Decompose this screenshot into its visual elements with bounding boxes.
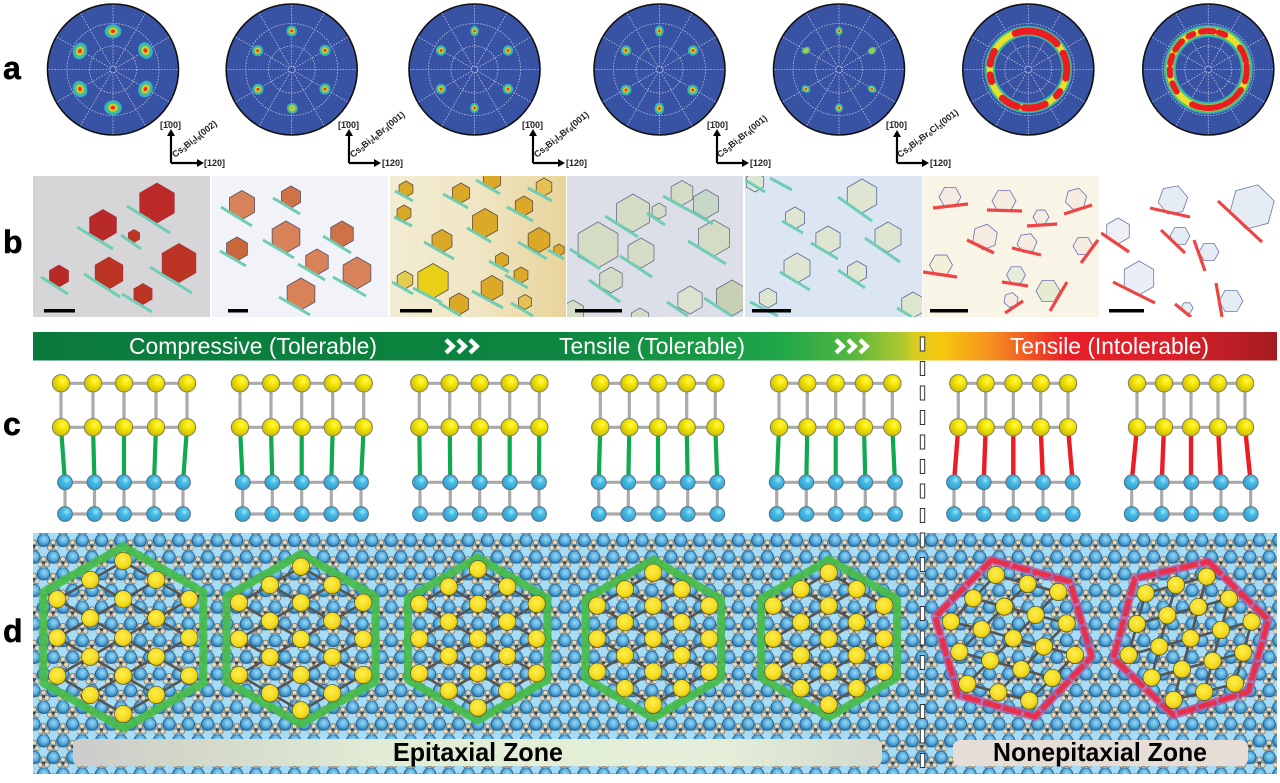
- axes 1: [120]: [204, 158, 225, 168]
- axes 4: [707, 113, 771, 168]
- axes 3: [1̄00]: [522, 120, 543, 130]
- axes 3: 3: [559, 135, 565, 142]
- axes 4: 9: [747, 130, 754, 137]
- zone boundary dashed line: [920, 337, 925, 768]
- pole figure 4: [594, 4, 725, 135]
- micrograph 1: [33, 176, 210, 317]
- lattice schematic 2: [231, 375, 372, 521]
- axes 4: [1̄00]: [707, 120, 728, 130]
- axes 3: [120]: [566, 158, 587, 168]
- axes 5: 3: [938, 124, 945, 131]
- axes 3: Cs: [532, 145, 547, 160]
- axes 5: Bi: [907, 137, 920, 151]
- pole figure 5: [774, 4, 904, 135]
- axes 1: 2: [192, 139, 199, 146]
- axes 1: I: [192, 133, 200, 143]
- axes 1: Cs: [170, 145, 185, 160]
- axes 3: [522, 109, 592, 168]
- pole figure 7: ring: [1143, 4, 1274, 135]
- micrograph 7: [1101, 176, 1277, 317]
- axes 2: Cs: [348, 145, 363, 160]
- micrograph 6: [923, 176, 1099, 317]
- misoriented polygon 6: [935, 560, 1092, 717]
- bar text: compressive tolerable: Compressive (Tolerable): [129, 333, 377, 359]
- panel label d: d: [3, 613, 23, 649]
- epitaxial zone label: [73, 737, 882, 767]
- axes 1: Bi: [182, 137, 195, 150]
- axes 5: [1̄00]: [886, 120, 907, 130]
- misoriented polygon 7: [1113, 562, 1268, 715]
- axes 5: Br: [917, 129, 931, 143]
- pole figure 3: [409, 4, 540, 135]
- axes 2: 3: [385, 126, 392, 134]
- micrograph 4: [567, 176, 743, 317]
- axes 1: (002): [196, 118, 219, 139]
- epitaxial zone label: Epitaxial Zone: [393, 737, 563, 767]
- micrograph 2: [212, 176, 388, 317]
- axes 1: [1̄00]: [160, 120, 181, 130]
- nonepitaxial zone label: Nonepitaxial Zone: [993, 737, 1207, 767]
- chevrons 1: [446, 340, 477, 353]
- panel label c: c: [3, 406, 21, 442]
- panel b: micrographs: [33, 176, 1275, 317]
- panel label a: a: [3, 50, 21, 86]
- axes 3: Bi: [544, 137, 557, 150]
- micrograph 5: [742, 172, 924, 318]
- axes 3: 2: [554, 139, 561, 146]
- lattice schematic 7: [1124, 375, 1258, 521]
- lattice schematic 6: [947, 375, 1080, 521]
- lattice schematic 5: [769, 375, 902, 521]
- pole figure 6: ring: [963, 4, 1094, 135]
- axes 4: Bi: [727, 137, 740, 150]
- hexagon 3: [408, 558, 547, 720]
- strain gradient bar: [33, 332, 1277, 360]
- axes 4: 3: [727, 146, 734, 153]
- axes 2: Bi: [360, 137, 373, 150]
- pole figure 1: [48, 4, 178, 135]
- axes 5: [886, 107, 961, 168]
- axes 1: 9: [197, 135, 204, 142]
- axes 5: (001): [937, 107, 960, 128]
- hexagon 4: [586, 560, 721, 718]
- lattice schematic 3: [411, 375, 548, 521]
- axes 3: 3: [544, 146, 551, 153]
- axes 3: 6: [569, 126, 576, 134]
- bar text: tensile intolerable: Tensile (Intolerable): [1010, 333, 1209, 359]
- axes 4: 2: [737, 139, 744, 146]
- hexagon 5: [761, 560, 897, 717]
- axes 5: 2: [918, 139, 924, 146]
- axes 2: 2: [370, 139, 377, 146]
- bar text: tensile tolerable: Tensile (Tolerable): [559, 333, 745, 359]
- axes 4: Br: [736, 128, 751, 142]
- axes 4: Cs: [715, 145, 730, 160]
- axes 3: I: [553, 133, 561, 142]
- panel d: atomic overlay on substrate: [33, 533, 1277, 774]
- panel c: lattice schematics: [52, 375, 1258, 521]
- axes 5: Cl: [928, 122, 941, 135]
- lattice schematic 1: [52, 375, 196, 521]
- axes 5: 3: [908, 147, 914, 154]
- axes 2: I: [369, 133, 377, 142]
- axes 2: [120]: [382, 158, 403, 168]
- axes 3: (001): [568, 109, 591, 130]
- axes 1: 3: [183, 146, 189, 154]
- axes 1: [160, 118, 225, 168]
- hexagon 2: [226, 554, 376, 724]
- micrograph 3: [390, 170, 566, 317]
- axes 5: [120]: [930, 158, 951, 168]
- hexagon 1: [43, 546, 203, 728]
- substrate lattice background: [33, 533, 1277, 774]
- axes 3: Br: [558, 124, 572, 139]
- axes 2: 6: [375, 135, 381, 142]
- axes 2: 3: [360, 146, 367, 153]
- lattice schematic 4: [591, 375, 725, 521]
- panel label b: b: [3, 224, 23, 260]
- axes 2: Br: [374, 124, 388, 139]
- panel a: pole figures: [48, 4, 1274, 168]
- pole figure 2: [226, 4, 357, 135]
- axes 4: [120]: [750, 158, 771, 168]
- axes 4: (001): [746, 113, 769, 134]
- axes 5: Cs: [895, 145, 910, 160]
- chevrons 2: [836, 340, 867, 353]
- axes 5: 6: [928, 131, 935, 138]
- axes 2: [338, 109, 408, 168]
- axes 2: [1̄00]: [338, 120, 359, 130]
- axes 2: (001): [384, 109, 407, 130]
